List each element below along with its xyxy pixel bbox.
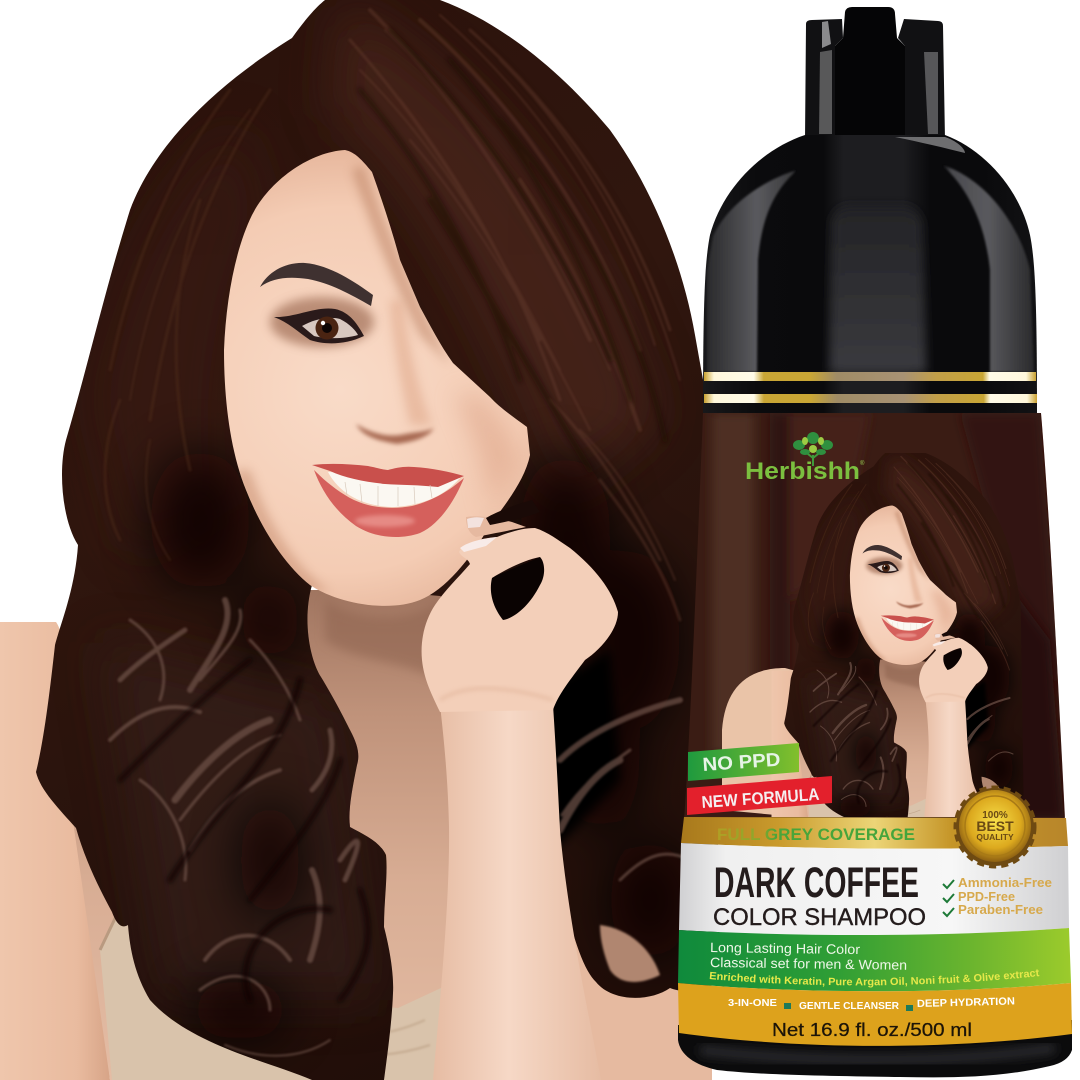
sticker: no ppd: NO PPD — [702, 750, 781, 776]
lip gloss — [355, 515, 415, 527]
deep hydration: DEEP HYDRATION — [917, 995, 1015, 1010]
teeth gaps — [345, 482, 432, 506]
enriched line: Enriched with Keratin, Pure Argan Oil, Noni fruit & Olive extract — [710, 969, 1040, 988]
face shading — [235, 165, 520, 592]
eye socket shadow — [270, 297, 374, 347]
cap nozzle — [835, 7, 905, 140]
dark hair shadows — [150, 450, 690, 1040]
dark curl lines — [120, 660, 368, 1000]
knuckle shade — [440, 688, 553, 700]
deep shadow behind wrist — [545, 650, 620, 850]
beige top — [100, 908, 441, 1080]
eyebrow — [260, 263, 373, 306]
eye — [274, 309, 364, 343]
3-in-one: 3-IN-ONE — [728, 997, 777, 1009]
label hair artwork — [684, 413, 1065, 820]
right gloss — [942, 165, 1034, 372]
label gold band — [681, 817, 1068, 849]
registered mark: ® — [860, 460, 865, 467]
top sheen — [895, 137, 965, 153]
tree icon — [793, 432, 833, 466]
forearm — [433, 705, 601, 1080]
right side skin — [550, 800, 712, 1080]
lower lip — [314, 470, 464, 537]
under-chin neck shadow — [325, 600, 440, 680]
nail two — [460, 537, 497, 552]
net volume: Net 16.9 fl. oz./500 ml — [772, 1020, 972, 1040]
sticker: no ppd — [688, 743, 799, 781]
cheek shade — [455, 395, 520, 510]
check icon ammonia — [943, 880, 954, 888]
smile mouth — [312, 464, 464, 537]
free-from checklist — [943, 875, 1052, 917]
label orange band — [678, 983, 1072, 1046]
right hair extension in label — [1020, 596, 1065, 817]
separator two — [906, 1005, 913, 1011]
upper hair strands — [350, 10, 680, 620]
skin gap in right lock — [600, 925, 660, 982]
benefits row — [728, 995, 1015, 1012]
brand name: Herbishh — [745, 458, 860, 485]
label artwork — [712, 413, 1064, 831]
ammonia-free: Ammonia-Free — [958, 875, 1052, 890]
teeth — [328, 472, 460, 507]
dark gap behind hand — [486, 555, 555, 700]
mini model photo — [772, 453, 1027, 831]
black lower base — [678, 1020, 1072, 1077]
quality seal: QUALITY — [976, 832, 1014, 842]
lower curl highlights — [110, 600, 690, 1056]
gentle cleanser: GENTLE CLEANSER — [799, 1000, 899, 1012]
nose base — [356, 424, 434, 444]
nail one — [467, 517, 484, 528]
upper sweep sheen — [330, 0, 660, 500]
shampoo bottle — [678, 7, 1072, 1078]
left gloss — [707, 170, 797, 372]
check icon ppd — [943, 894, 954, 902]
sticker: new formula: NEW FORMULA — [701, 785, 820, 812]
long lasting text: Long Lasting Hair Color — [710, 940, 861, 957]
separator one — [784, 1003, 791, 1009]
ppd-free: PPD-Free — [958, 889, 1015, 904]
quality seal: BEST — [976, 818, 1014, 834]
check icon paraben — [943, 908, 954, 916]
quality seal: 100% — [982, 810, 1008, 821]
paraben-free: Paraben-Free — [958, 902, 1043, 917]
centre window — [830, 206, 926, 372]
hair strand by fingers — [486, 500, 540, 525]
classical set text: Classical set for men & Women — [710, 955, 907, 973]
quality seal — [956, 788, 1034, 866]
full grey coverage text: FULL GREY COVERAGE — [717, 825, 915, 844]
gold ring two — [704, 394, 1037, 403]
cap skirt — [805, 19, 843, 140]
nose shadow — [390, 300, 432, 425]
upper finger — [466, 516, 526, 537]
cap highlights — [819, 50, 832, 134]
label hair sheen — [712, 413, 1060, 753]
bottle shoulder and body — [703, 135, 1037, 415]
hair — [0, 0, 730, 1080]
cap — [805, 7, 945, 140]
left hair strands — [105, 90, 270, 560]
gold ring one — [704, 372, 1036, 381]
hair mass — [0, 0, 730, 1080]
title: dark coffee: DARK COFFEE — [714, 859, 919, 907]
neck and chest — [70, 590, 560, 1080]
subtitle: color shampoo: COLOR SHAMPOO — [713, 904, 926, 931]
hair shadow on face — [352, 165, 450, 365]
sticker: new formula — [687, 776, 832, 815]
label mini shoulder — [722, 668, 794, 815]
palm and fingers — [422, 528, 618, 712]
label green band — [678, 928, 1071, 991]
woman model photo — [0, 0, 730, 1080]
label white band — [679, 843, 1069, 935]
upper lip — [312, 464, 464, 487]
left arm and shoulder — [0, 622, 110, 1080]
jaw shade — [235, 470, 330, 592]
hand — [422, 500, 618, 712]
brand logo — [745, 432, 865, 485]
face — [224, 150, 530, 606]
